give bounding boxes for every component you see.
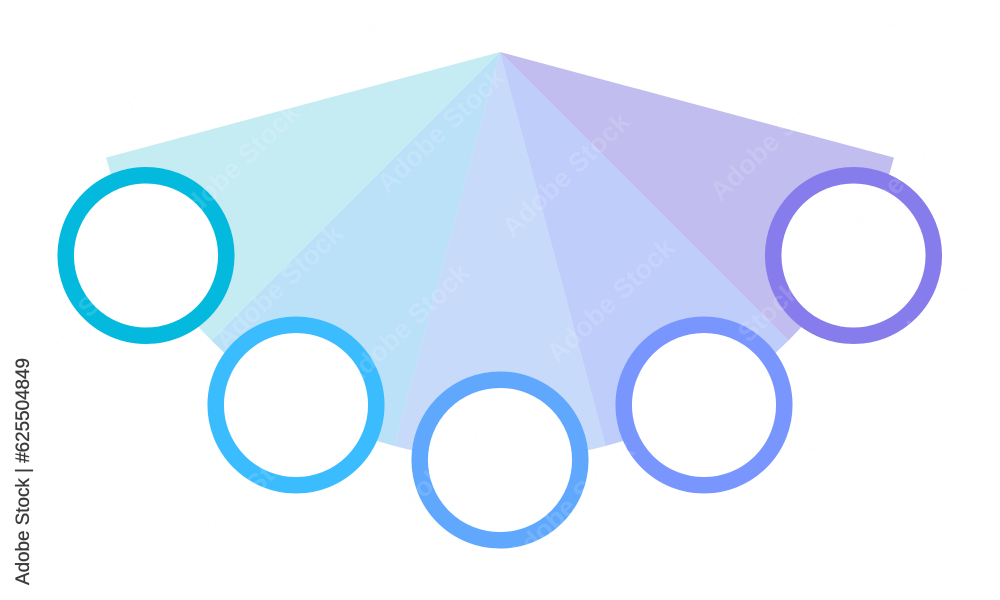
- watermark pattern: Adobe Stock: [704, 70, 844, 207]
- ring 1: teal: [66, 175, 226, 336]
- watermark pattern: Adobe Stock: [864, 242, 1000, 379]
- watermark pattern: Adobe Stock: [39, 52, 179, 189]
- sector 2: sky blue: [212, 52, 500, 446]
- watermark pattern: Adobe Stock: [174, 427, 314, 564]
- sector 1: teal: [106, 52, 500, 340]
- watermark pattern: Adobe Stock: [6, 250, 146, 387]
- watermark pattern: Adobe Stock: [371, 62, 511, 199]
- watermark pattern: Adobe Stock: [829, 112, 969, 249]
- ring 5: purple: [773, 175, 934, 336]
- stock id label: Adobe Stock | #625504849: [13, 358, 34, 585]
- watermark pattern: Adobe Stock: [209, 218, 349, 355]
- sector 5: purple: [500, 52, 894, 340]
- watermark pattern: Adobe Stock: [336, 257, 476, 394]
- watermark pattern: Adobe Stock: [501, 435, 641, 572]
- watermark pattern: Adobe Stock: [381, 392, 521, 529]
- watermark pattern: Adobe Stock: [49, 382, 189, 519]
- watermark pattern: Adobe Stock: [496, 106, 636, 243]
- sector 3: light blue: [394, 52, 606, 460]
- ring 3: blue: [420, 380, 580, 540]
- ring 4: periwinkle: [624, 325, 784, 485]
- watermark pattern: Adobe Stock: [541, 232, 681, 369]
- watermark pattern: Adobe Stock: [666, 275, 806, 412]
- watermark pattern: Adobe Stock: [839, 443, 979, 580]
- watermark pattern: Adobe Stock: [166, 97, 306, 234]
- sector 4: periwinkle: [500, 52, 788, 446]
- watermark pattern: Adobe Stock: [714, 402, 854, 539]
- ring 2: sky blue: [216, 325, 376, 485]
- fan sectors: [106, 52, 894, 460]
